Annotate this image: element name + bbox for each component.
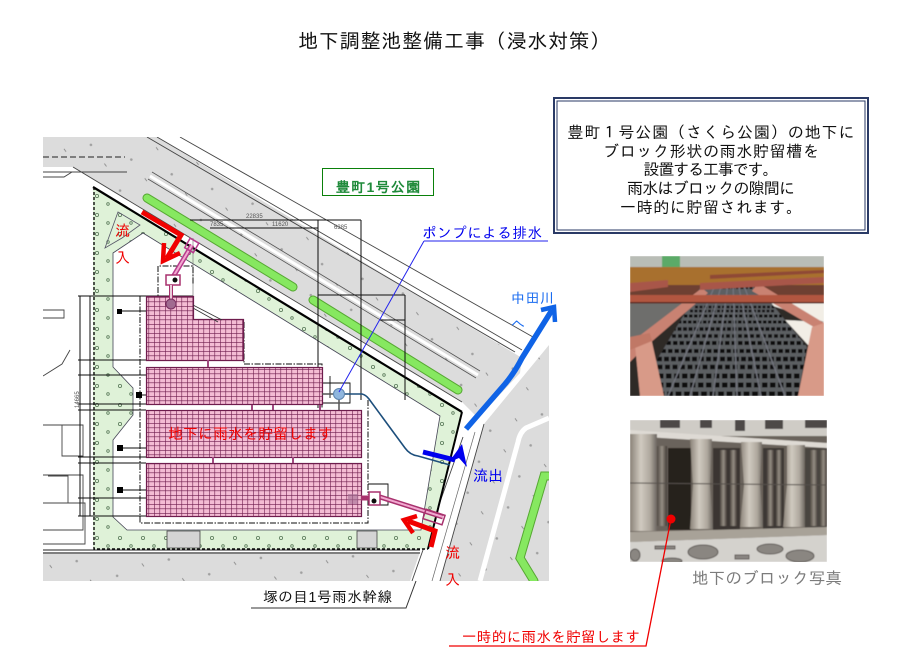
foreground block (630, 535, 827, 562)
label: north inflow: 入 (115, 250, 130, 267)
inflow pipe north (166, 238, 199, 309)
dash-dot boundary around reservoir (140, 266, 368, 523)
callout: pump drainage (339, 225, 548, 392)
description text: 一時的に貯留されます。 (620, 199, 802, 217)
description text: 豊町１号公園（さくら公園）の地下に (568, 124, 854, 142)
dimension figures: 7835 (210, 222, 224, 228)
description text: 雨水はブロックの隙間に (627, 180, 795, 198)
top block edge (630, 420, 827, 436)
drainage pipe (339, 394, 450, 465)
dimension figures: 11620 (272, 222, 289, 228)
panel: description box (554, 98, 868, 233)
main pillars (630, 434, 805, 531)
road edge lines (147, 137, 533, 352)
pump (322, 388, 344, 410)
inspection squares (117, 309, 146, 493)
caption: block photo: 地下のブロック写真 (692, 570, 842, 588)
park outline (93, 187, 462, 412)
road: east side (440, 345, 549, 581)
steel columns (635, 333, 664, 396)
planting bed outline (105, 212, 140, 248)
black block tray (655, 283, 807, 396)
label: to Nakata river (511, 290, 554, 332)
site plan map (43, 137, 549, 581)
callout: storm sewer (251, 581, 416, 608)
road: north-east diagonal (43, 137, 522, 418)
dimension figures (75, 214, 348, 408)
label: outflow: 流出 (473, 468, 503, 485)
label: north inflow (115, 223, 130, 267)
dimension figures: 6385 (334, 225, 348, 231)
floor strip (630, 527, 827, 542)
callout: temporary storage (449, 514, 676, 646)
horizontal beam (630, 430, 827, 448)
green capsules (147, 198, 548, 581)
secondary pillars (657, 446, 827, 526)
label: park name: 豊町1号公園 (336, 179, 420, 195)
label: south inflow: 流 (445, 545, 460, 562)
dimension figures: 14665 (75, 391, 81, 408)
description text (568, 124, 854, 217)
inflow pipe south (348, 492, 445, 525)
description text: ブロック形状の雨水貯留槽を (603, 143, 819, 161)
callout: temporary storage: 一時的に雨水を貯留します (462, 630, 640, 646)
reservoir block grids (146, 296, 362, 516)
photo: underground blocks (630, 420, 827, 564)
title: 地下調整池整備工事（浸水対策） (298, 31, 610, 53)
arrow: south inflow (404, 516, 435, 547)
planted park strip (93, 187, 462, 549)
joint line (630, 483, 827, 485)
arrow: north inflow (142, 212, 181, 261)
callout: storm sewer: 塚の目1号雨水幹線 (263, 589, 392, 606)
road: south side (43, 552, 420, 581)
callout: pump drainage: ポンプによる排水 (422, 225, 542, 242)
photo: block installation (630, 256, 824, 396)
paved gaps (167, 531, 377, 548)
site background (630, 256, 824, 268)
dimension lines (78, 220, 405, 516)
grey block ribs (668, 283, 785, 396)
label: park name (322, 168, 434, 196)
dimension figures: 22835 (246, 214, 263, 220)
label: to Nakata river: 中田川 (511, 290, 554, 306)
steel beams (630, 270, 824, 362)
arrow: pump outflow (423, 444, 467, 467)
label: south inflow (445, 545, 460, 589)
arrow: outflow to river (466, 307, 555, 429)
separator ticks (208, 360, 320, 463)
label: stored underground: 地下に雨水を貯留します (168, 426, 333, 443)
label: south inflow: 入 (445, 572, 460, 589)
label: north inflow: 流 (115, 223, 130, 240)
label: to Nakata river: へ (511, 316, 525, 332)
dark interior (668, 448, 691, 530)
left neighbouring lines (43, 172, 127, 544)
description text: 設置する工事です。 (644, 162, 778, 179)
